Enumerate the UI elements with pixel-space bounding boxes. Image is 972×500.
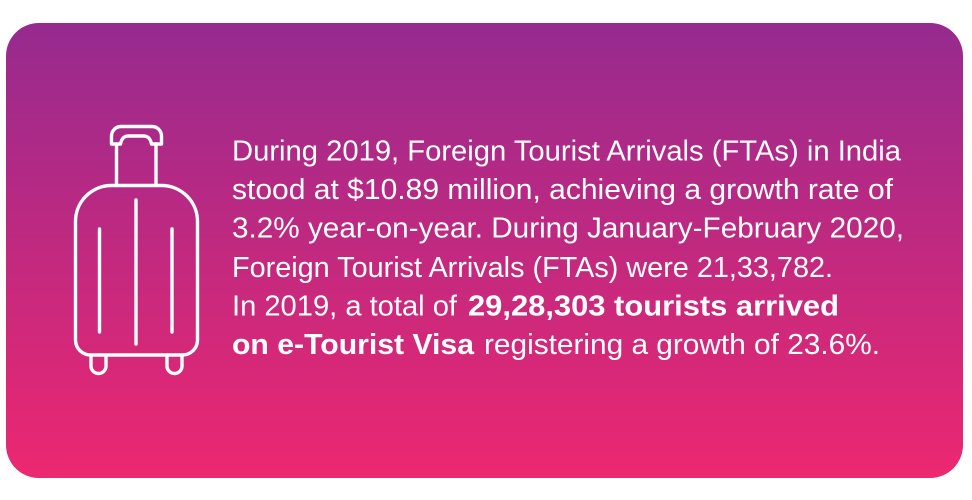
text block: tourism statistics: on e-Tourist Visa [232, 329, 475, 361]
text block: tourism statistics: stood at $10.89 million, achieving a growth rate of [232, 174, 893, 206]
text block: tourism statistics: Foreign Tourist Arrivals (FTAs) were 21,33,782. [232, 252, 833, 284]
text block: tourism statistics: 29,28,303 tourists arrived [468, 290, 839, 322]
text block: tourism statistics: registering a growth of 23.6%. [484, 329, 880, 361]
text block: tourism statistics: In 2019, a total of [232, 290, 457, 322]
text block: tourism statistics [232, 136, 904, 361]
icon: suitcase [75, 126, 198, 374]
text block: tourism statistics: 3.2% year-on-year. During January-February 2020, [232, 212, 904, 244]
text block: tourism statistics: During 2019, Foreign Tourist Arrivals (FTAs) in India [232, 136, 901, 168]
